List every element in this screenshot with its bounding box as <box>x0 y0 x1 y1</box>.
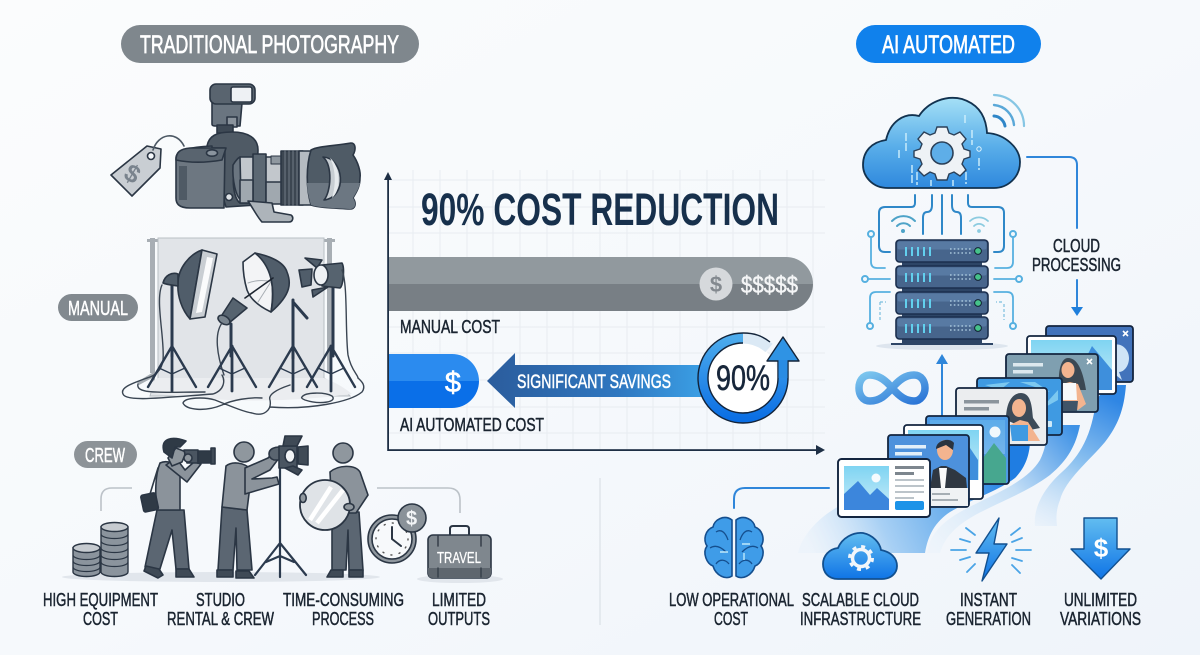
umbrella light <box>243 253 307 358</box>
ground shadows <box>62 572 503 583</box>
captions: traditional costs: LIMITED <box>432 590 486 610</box>
gauge: 90 percent: 90% <box>716 359 770 398</box>
price tag <box>111 136 184 196</box>
lens hood <box>307 143 360 209</box>
bar: manual cost: $$$$$ <box>741 272 798 299</box>
backdrop stand <box>137 238 335 385</box>
camera body <box>176 132 258 208</box>
icon: clock with dollar coin <box>368 504 426 563</box>
captions: AI benefits: INSTANT <box>960 590 1017 610</box>
icon: down arrow with dollar: $ <box>1094 533 1109 563</box>
icon: coin stacks <box>73 522 128 576</box>
small flash head <box>216 298 247 375</box>
flash unit <box>210 84 255 133</box>
price tag: $ <box>119 159 145 190</box>
captions: traditional costs: PROCESS <box>312 609 374 629</box>
arrow: significant savings <box>487 353 705 408</box>
lens foot <box>248 201 293 222</box>
card: pale landscape <box>1027 336 1116 394</box>
flowing output ribbons <box>798 385 1126 553</box>
captions: AI benefits: VARIATIONS <box>1060 609 1141 629</box>
backdrop and studio lights <box>122 238 364 414</box>
chart background grid <box>388 170 825 450</box>
captions: AI benefits <box>669 590 1141 629</box>
captions: traditional costs: OUTPUTS <box>428 609 490 629</box>
captions: traditional costs: HIGH EQUIPMENT <box>43 590 158 610</box>
arrow: up to server <box>936 354 948 416</box>
heading pill: traditional photography: TRADITIONAL PHOTOGRAPHY <box>140 31 399 59</box>
barn door light <box>299 258 358 378</box>
captions: traditional costs: STUDIO <box>196 590 245 610</box>
gauge: 90 percent <box>698 333 799 423</box>
figure: crew with reflector <box>300 443 368 577</box>
card: man in suit <box>888 435 969 507</box>
card: woman in blue top <box>956 388 1047 445</box>
tripods <box>148 346 196 391</box>
icon: server rack <box>876 240 1008 350</box>
bar: manual cost: $ <box>710 272 722 297</box>
label pill: crew: CREW <box>85 445 125 467</box>
icon: lightning bolt <box>951 518 1031 581</box>
label: AI automated cost: AI AUTOMATED COST <box>400 415 544 435</box>
card: blue pattern <box>977 378 1062 435</box>
backdrop paper <box>150 238 350 396</box>
captions: AI benefits: UNLIMITED <box>1064 590 1137 610</box>
captions: traditional costs: RENTAL & CREW <box>167 609 274 629</box>
arrow: significant savings: SIGNIFICANT SAVINGS <box>517 372 671 393</box>
label pill: manual <box>58 294 138 321</box>
card: green mountain landscape <box>926 416 1009 484</box>
captions: AI benefits: INFRASTRUCTURE <box>800 609 921 629</box>
icon: travel suitcase <box>428 526 491 578</box>
captions: traditional costs <box>43 590 490 629</box>
icon: travel suitcase: TRAVEL <box>437 550 481 567</box>
card: dark blue with chat bubble <box>1046 326 1133 382</box>
connector: cloud processing: CLOUD <box>1053 236 1100 256</box>
label pill: manual: MANUAL <box>68 298 128 320</box>
connector: cloud processing <box>1027 157 1121 316</box>
heading pill: traditional photography <box>121 25 419 63</box>
card: woman in white top <box>1006 354 1098 412</box>
connector: cloud processing: PROCESSING <box>1032 255 1121 275</box>
card: front landscape <box>838 459 930 517</box>
output card stack <box>838 326 1133 517</box>
softbox light <box>147 250 217 378</box>
heading pill: AI automated: AI AUTOMATED <box>882 31 1015 59</box>
icon: down arrow with dollar <box>1071 518 1130 579</box>
icon: clock with dollar coin: $ <box>406 508 417 530</box>
bracket connectors <box>101 488 460 513</box>
icon: camera with price tag <box>111 84 360 222</box>
connector: cards to brain <box>734 488 829 508</box>
icon: brain <box>705 518 763 578</box>
bar: AI automated cost <box>389 354 479 408</box>
axes <box>384 172 825 455</box>
captions: traditional costs: TIME-CONSUMING <box>283 590 404 610</box>
label: manual cost: MANUAL COST <box>400 317 500 337</box>
captions: traditional costs: COST <box>83 609 118 629</box>
captions: AI benefits: COST <box>714 609 748 629</box>
chart title: 90% COST REDUCTION <box>421 184 779 235</box>
icon: light stand with barn doors <box>255 436 308 577</box>
captions: AI benefits: SCALABLE CLOUD <box>802 590 919 610</box>
captions: AI benefits: LOW OPERATIONAL <box>669 590 794 610</box>
icon: scalable cloud <box>823 533 897 579</box>
figure: crew holding light <box>217 442 279 578</box>
icon: infinity loop <box>859 375 925 401</box>
icon: cloud with gear <box>863 98 1020 188</box>
bar: AI automated cost: $ <box>445 367 461 399</box>
label pill: crew <box>74 441 137 468</box>
heading pill: AI automated <box>856 25 1041 63</box>
chart: cost comparison <box>384 172 825 455</box>
server circuit connectors <box>862 195 1022 329</box>
captions: AI benefits: GENERATION <box>946 609 1031 629</box>
icon: cloud wifi arcs <box>994 95 1024 126</box>
telephoto lens <box>233 151 311 205</box>
card: pale backdrop <box>904 425 983 499</box>
tangled cables <box>122 375 364 414</box>
figure: photographer <box>140 439 215 578</box>
bar: manual cost <box>389 257 813 311</box>
